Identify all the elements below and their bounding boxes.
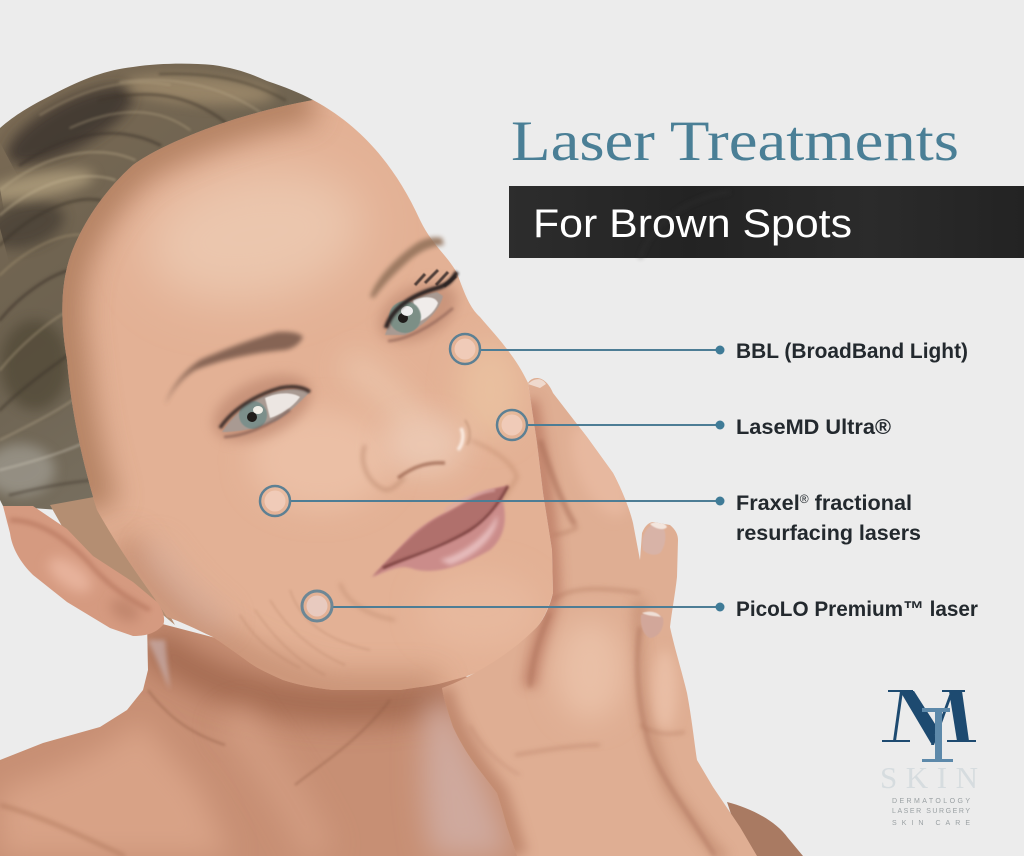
pink neck highlight: [423, 700, 510, 856]
logo tagline: [892, 798, 970, 827]
title: Laser Treatments: [511, 110, 959, 173]
fingernail: upper: [642, 523, 665, 555]
hair: [0, 60, 330, 520]
right eye: [369, 269, 467, 355]
portrait of woman: [0, 60, 803, 856]
nose: [345, 360, 470, 490]
callout: PicoLO Premium: PicoLO Premium™ laser: [736, 597, 979, 621]
logo: MT Skin: [880, 690, 978, 827]
right eyebrow: [370, 237, 444, 298]
callout: Fraxel: Fraxel: [736, 491, 799, 515]
skin and hair behind ear: [50, 495, 175, 625]
subtitle banner: [509, 186, 1024, 258]
logo wordmark: SKIN: [880, 760, 978, 795]
finger creases: [470, 440, 715, 856]
callout: BBL: BBL (BroadBand Light): [736, 339, 968, 363]
logo tagline: DERMATOLOGY: [892, 798, 970, 805]
callout: PicoLO Premium: [302, 591, 979, 621]
left eyebrow: [165, 332, 303, 405]
callout: LaseMD Ultra: LaseMD Ultra®: [736, 415, 891, 439]
hand: [430, 370, 770, 856]
logo tagline: LASER SURGERY: [892, 808, 970, 815]
cheek right light: [462, 351, 518, 430]
fingernail: index tip: [528, 379, 546, 388]
left eye: [203, 361, 321, 455]
face: [50, 90, 570, 700]
nasolabial fold: [470, 440, 517, 505]
callout: LaseMD Ultra: [497, 410, 891, 440]
hand shading: [442, 688, 517, 856]
marionette line: [340, 583, 395, 620]
collarbone crease: [0, 805, 125, 856]
jaw wrinkles: [241, 592, 368, 656]
logo tagline: SKIN CARE: [892, 820, 970, 827]
jaw shading: [120, 540, 440, 690]
logo monogram: [882, 690, 976, 762]
hair strands: [0, 74, 285, 495]
ear: [3, 506, 164, 636]
callout: Fraxel: fractional: [809, 491, 912, 515]
lips: [372, 486, 508, 577]
far shoulder: [727, 802, 803, 856]
callout: Fraxel: ®: [800, 492, 809, 506]
pale jaw patch: [156, 568, 208, 622]
callout: Fraxel: resurfacing lasers: [736, 521, 921, 545]
fingernail: lower: [641, 613, 663, 638]
subtitle text: For Brown Spots: [533, 202, 852, 246]
callout: BBL: [450, 334, 968, 364]
hairline shading: [62, 100, 313, 510]
neck tendon crease: [148, 690, 390, 785]
callout: Fraxel: [260, 486, 921, 545]
neck and shoulders: [0, 610, 803, 856]
forehead highlight: [142, 160, 368, 310]
